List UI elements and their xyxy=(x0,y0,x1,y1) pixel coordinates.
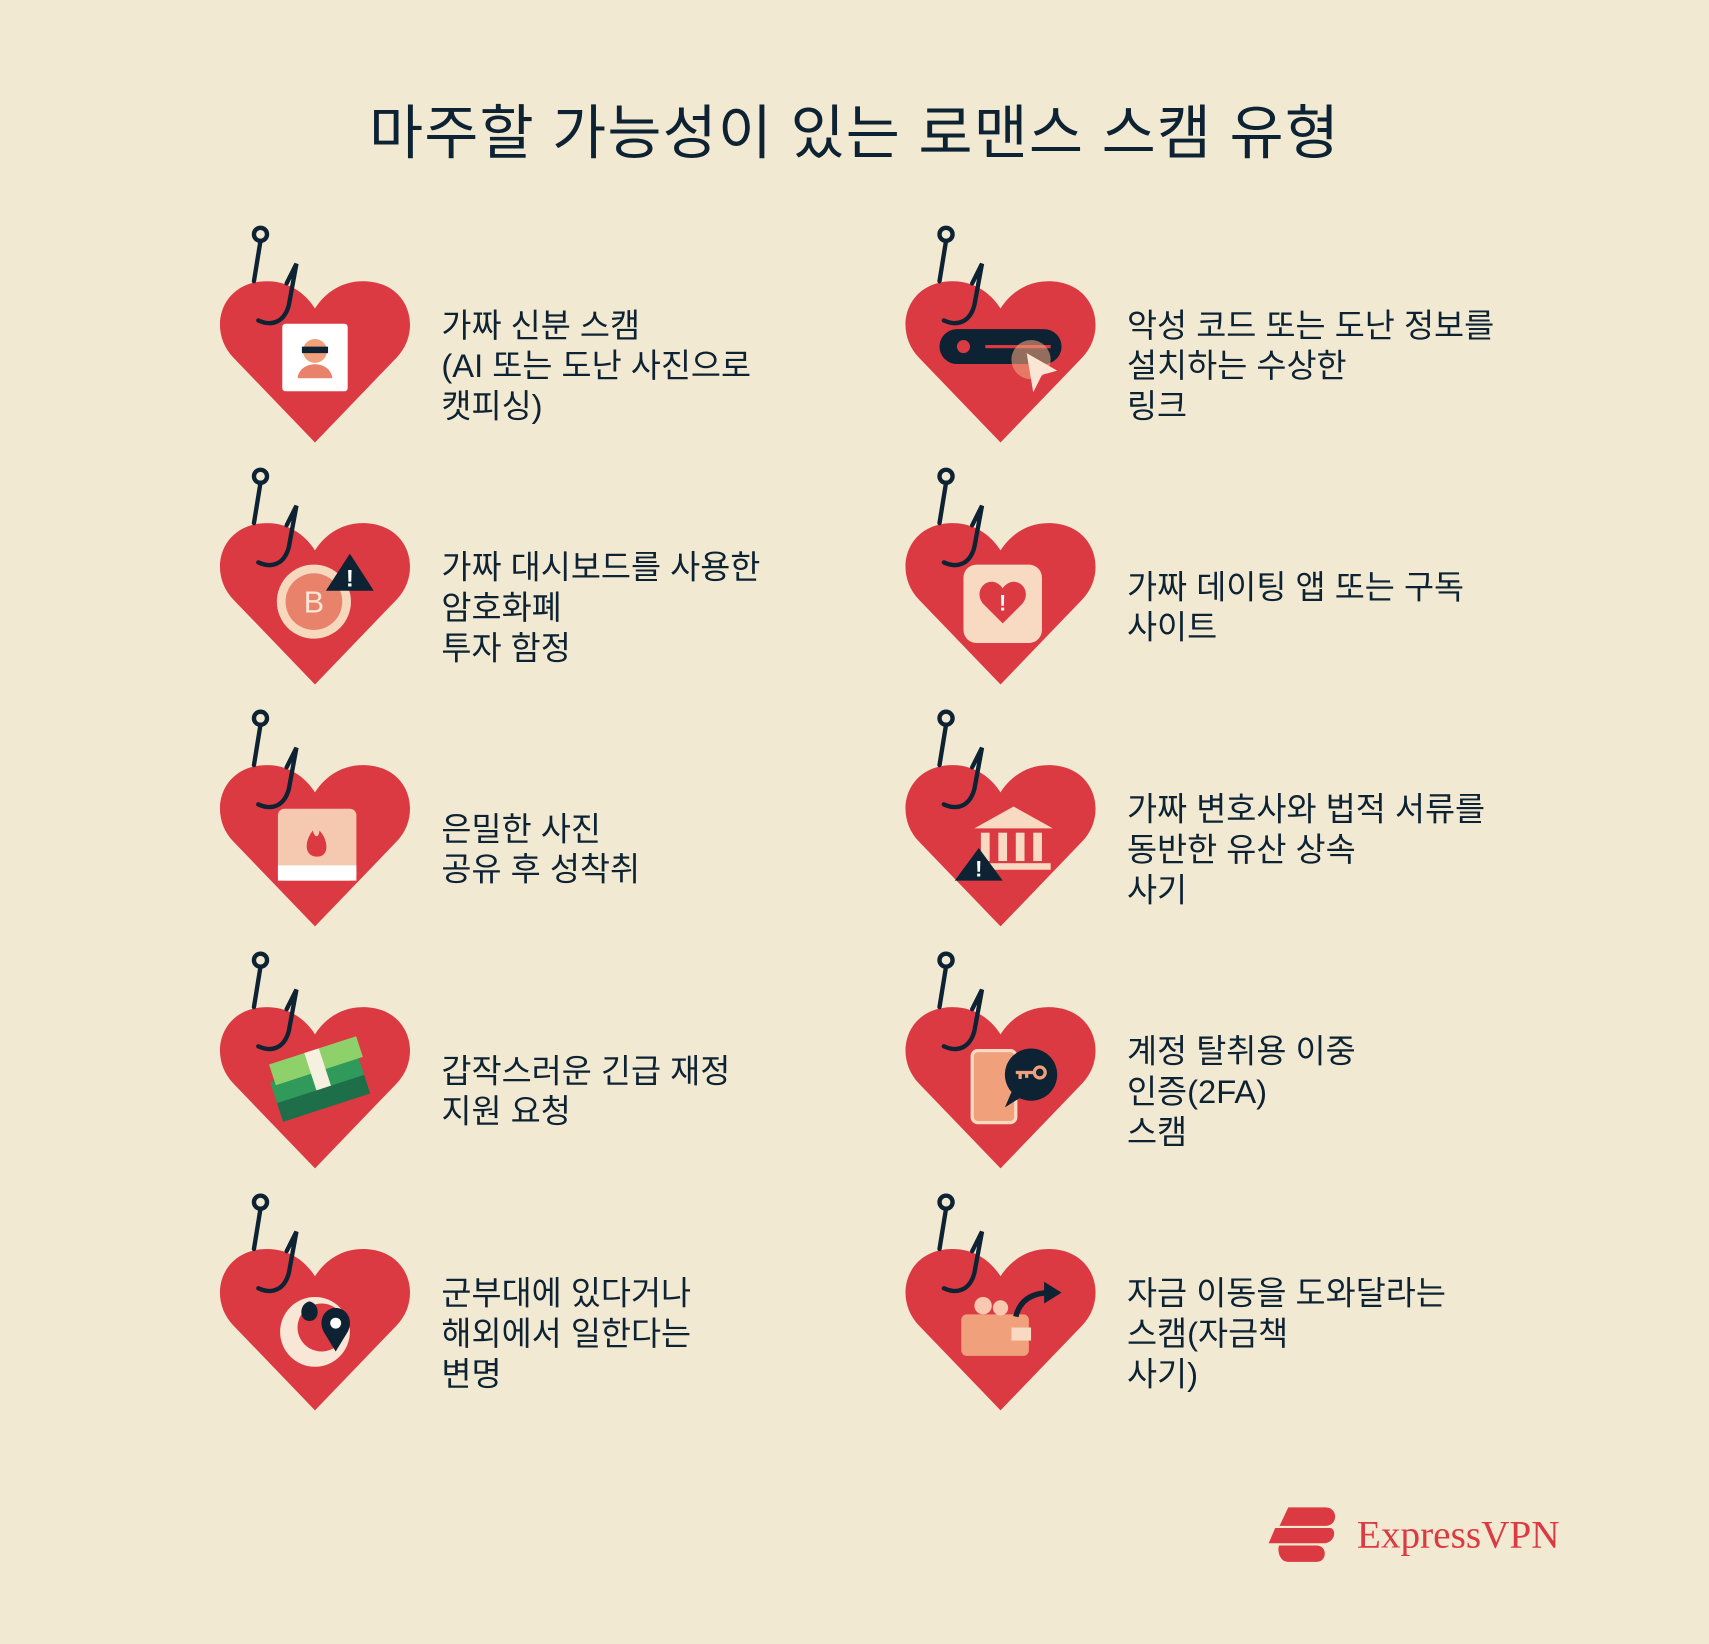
text xyxy=(441,550,760,666)
text xyxy=(1127,1034,1356,1150)
text: (AI 또는 도난 사진으로 xyxy=(441,348,751,384)
title: 마주할 가능성이 있는 로맨스 스캠 유형 xyxy=(369,101,1340,167)
logo: ExpressVPN: ExpressVPN xyxy=(1357,1514,1560,1557)
text xyxy=(441,308,751,425)
text xyxy=(1127,570,1464,646)
text: 변명 xyxy=(441,1356,502,1392)
text: 은밀한 사진 xyxy=(441,812,601,848)
text: 설치하는 수상한 xyxy=(1127,348,1347,384)
item: inheritance xyxy=(905,710,1485,926)
text: 지원 요청 xyxy=(441,1094,571,1130)
text: 계정 탈취용 이중 xyxy=(1127,1034,1356,1070)
text: 암호화폐 xyxy=(441,590,562,626)
text: 인증(2FA) xyxy=(1127,1074,1267,1110)
item: 2FA scam xyxy=(906,952,1356,1168)
item: military/abroad xyxy=(220,1194,691,1410)
item: crypto: B xyxy=(304,586,324,620)
text: 가짜 대시보드를 사용한 xyxy=(441,550,760,586)
text xyxy=(441,1276,691,1392)
item: money mule xyxy=(906,1194,1446,1410)
item: emergency money xyxy=(220,952,730,1168)
item: fake dating app: ! xyxy=(999,590,1006,615)
text xyxy=(1127,1276,1446,1392)
text: 사이트 xyxy=(1127,610,1217,646)
text xyxy=(1127,792,1485,908)
text: 군부대에 있다거나 xyxy=(441,1276,691,1312)
item: crypto xyxy=(220,468,760,684)
item: crypto: ! xyxy=(346,565,354,592)
text xyxy=(441,1054,730,1130)
text xyxy=(441,812,640,888)
text: 사기) xyxy=(1127,1356,1198,1392)
item: fake dating app xyxy=(905,468,1464,684)
text: 악성 코드 또는 도난 정보를 xyxy=(1127,308,1494,344)
item: sextortion xyxy=(220,710,640,926)
text: 가짜 변호사와 법적 서류를 xyxy=(1127,792,1485,828)
text: 캣피싱) xyxy=(441,389,543,425)
text: 갑작스러운 긴급 재정 xyxy=(441,1054,730,1090)
text: 가짜 신분 스캠 xyxy=(441,308,640,344)
item: fake identity xyxy=(220,226,751,442)
text xyxy=(1127,308,1494,425)
text: 스캠 xyxy=(1127,1114,1187,1150)
text: 투자 함정 xyxy=(441,631,571,666)
text: 해외에서 일한다는 xyxy=(441,1316,691,1352)
text: 링크 xyxy=(1127,389,1187,425)
text: 사기 xyxy=(1127,872,1187,908)
text: 자금 이동을 도와달라는 xyxy=(1127,1276,1446,1312)
item: malicious link xyxy=(905,226,1494,442)
text: 공유 후 성착취 xyxy=(441,852,640,888)
logo: ExpressVPN xyxy=(1268,1507,1560,1562)
text: 가짜 데이팅 앱 또는 구독 xyxy=(1127,570,1464,606)
item: inheritance: ! xyxy=(975,856,982,881)
text: 스캠(자금책 xyxy=(1127,1316,1288,1352)
text: 동반한 유산 상속 xyxy=(1127,832,1356,868)
